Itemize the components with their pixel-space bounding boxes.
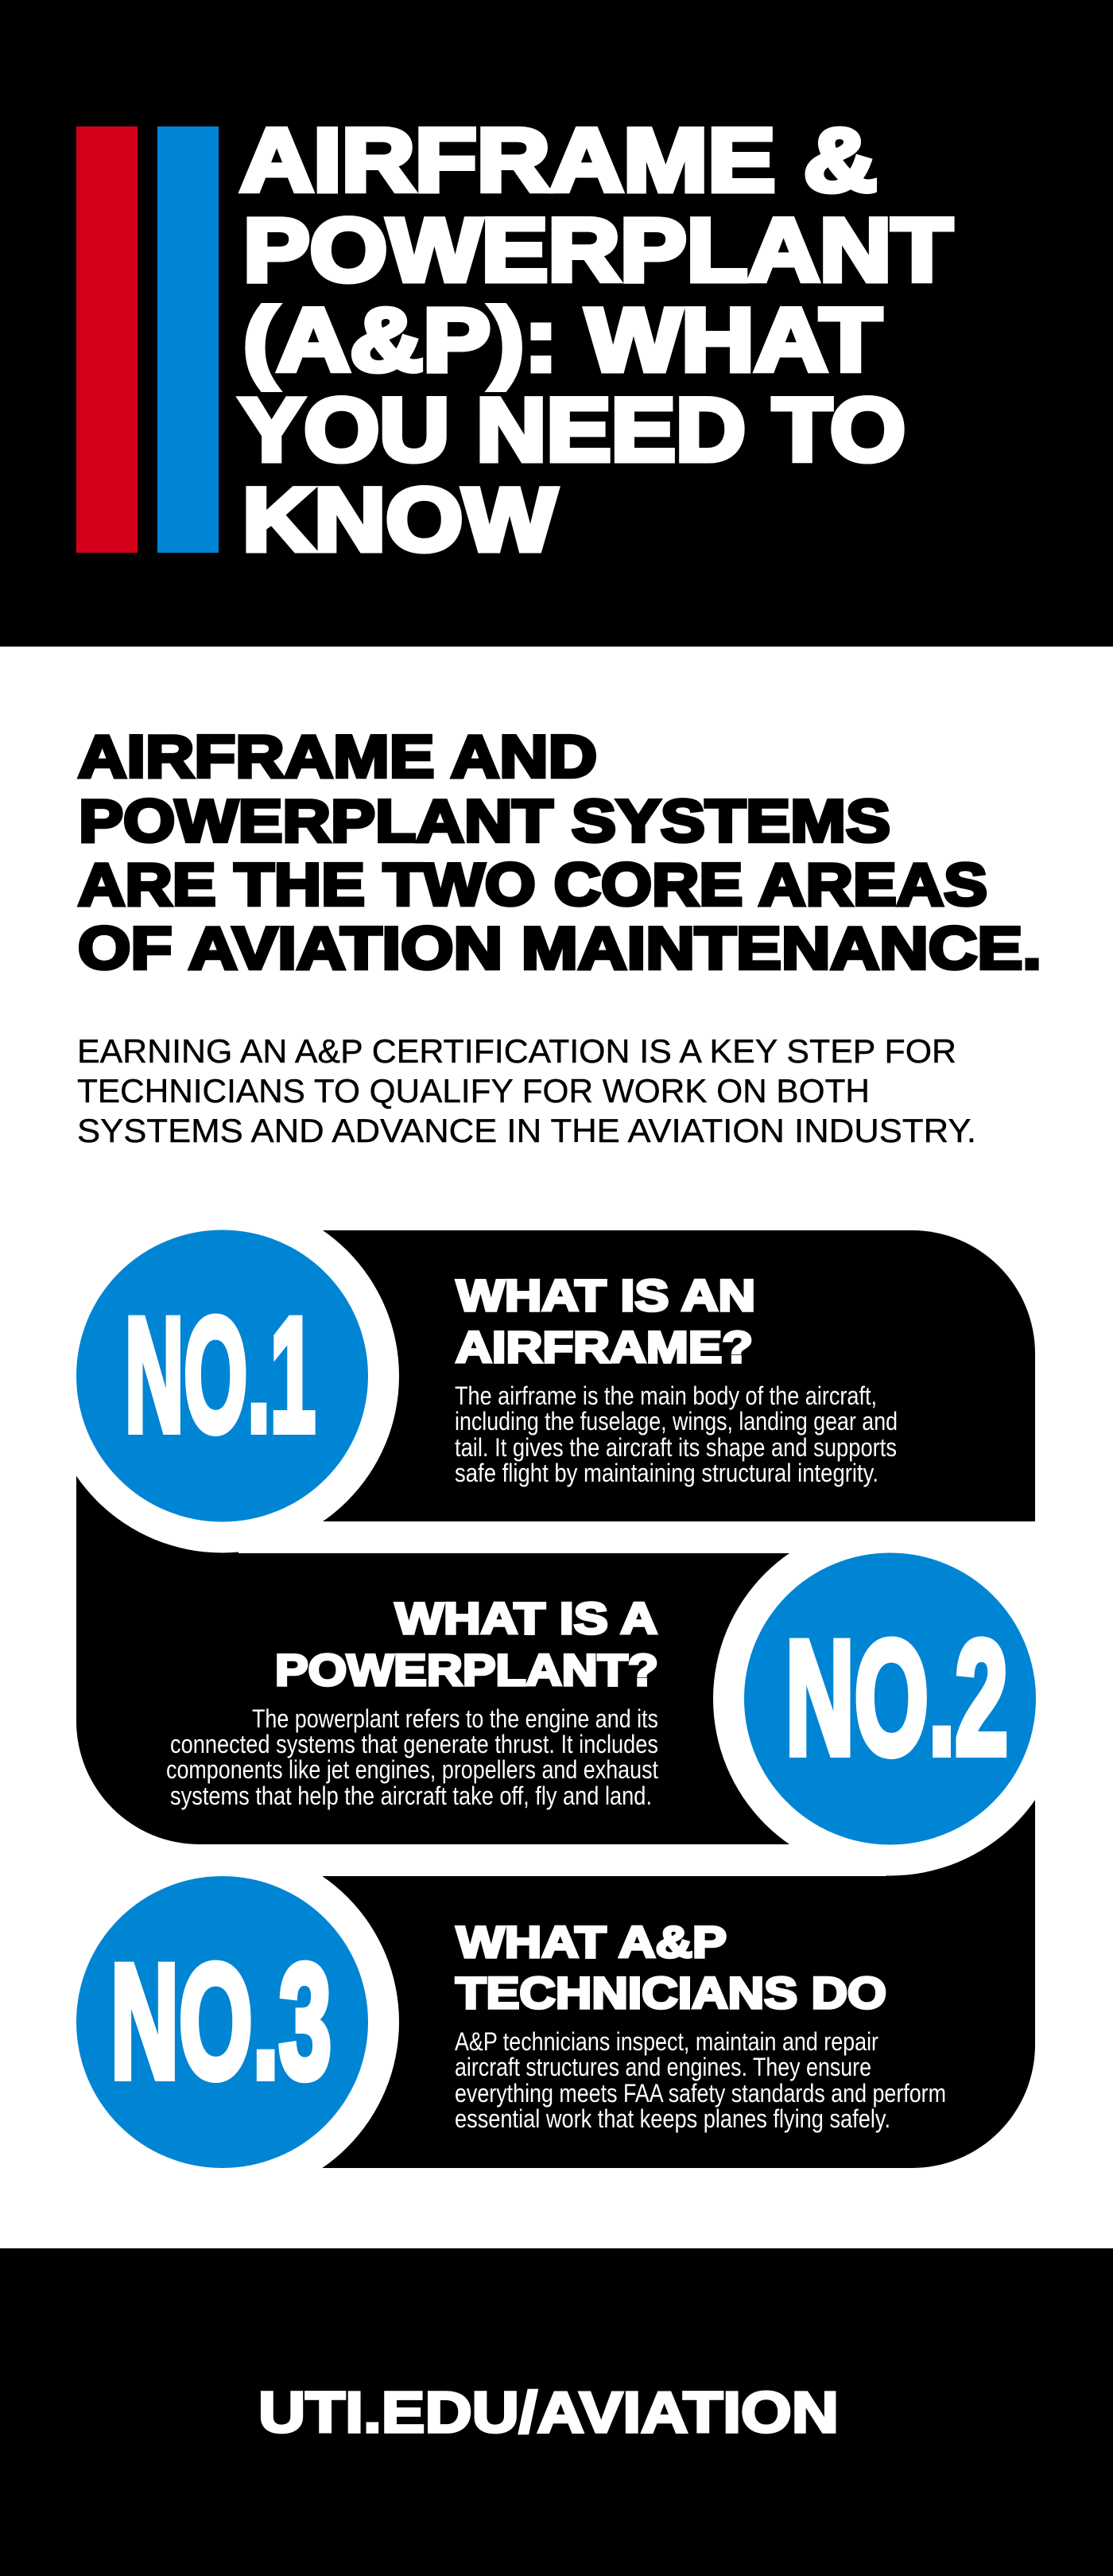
subheading: ARE THE TWO CORE AREAS xyxy=(78,851,987,918)
body text 2 xyxy=(166,1704,658,1810)
heading 2: POWERPLANT? xyxy=(275,1645,658,1695)
heading 3: WHAT A&P xyxy=(456,1917,727,1967)
heading 1 xyxy=(456,1270,755,1372)
intro text: TECHNICIANS TO QUALIFY FOR WORK ON BOTH xyxy=(77,1072,870,1109)
intro text: SYSTEMS AND ADVANCE IN THE AVIATION INDUSTRY. xyxy=(77,1112,976,1149)
intro text xyxy=(77,1032,976,1149)
body text 3: A&P technicians inspect, maintain and repair xyxy=(455,2027,878,2056)
badge 2 xyxy=(744,1552,1036,1845)
badge ring 1 xyxy=(45,1199,399,1552)
badge 3 xyxy=(76,1876,368,2168)
panel 3 shape xyxy=(223,1796,1035,2168)
subheading: POWERPLANT SYSTEMS xyxy=(79,787,890,854)
panel 1 shape xyxy=(223,1230,1035,1521)
badge ring 2 xyxy=(713,1522,1067,1875)
body text 1: including the fuselage, wings, landing gear and xyxy=(455,1407,898,1436)
blue bar xyxy=(157,126,219,553)
body text 2: The powerplant refers to the engine and its xyxy=(252,1704,658,1733)
heading 3 xyxy=(456,1917,886,2018)
title: POWERPLANT xyxy=(243,200,952,300)
panel 2 shape xyxy=(76,1471,890,1844)
subheading: OF AVIATION MAINTENANCE. xyxy=(78,915,1041,981)
title: YOU NEED TO xyxy=(239,380,906,480)
body text 3: aircraft structures and engines. They ensure xyxy=(455,2053,871,2081)
panel: what is an airframe xyxy=(45,1199,1035,1552)
title: KNOW xyxy=(242,470,556,569)
heading 1: AIRFRAME? xyxy=(456,1322,753,1372)
panel: what is a powerplant xyxy=(76,1471,1067,1875)
subheading: AIRFRAME AND xyxy=(78,723,597,790)
body text 1: tail. It gives the aircraft its shape and supports xyxy=(455,1433,897,1462)
intro text: EARNING AN A&P CERTIFICATION IS A KEY STEP FOR xyxy=(77,1032,956,1070)
badge 1: NO.1 xyxy=(125,1284,316,1466)
title: AIRFRAME & xyxy=(240,111,877,210)
header band xyxy=(0,0,1113,647)
body text 1: The airframe is the main body of the aircraft, xyxy=(455,1381,877,1410)
panel: what A&P technicians do xyxy=(45,1796,1035,2199)
badge 1 xyxy=(76,1230,368,1522)
body text 2: components like jet engines, propellers and exhaust xyxy=(166,1755,658,1784)
body text 3: everything meets FAA safety standards and perform xyxy=(455,2079,946,2108)
body text 2: systems that help the aircraft take off, fly and land. xyxy=(170,1781,652,1810)
body text 1: safe flight by maintaining structural integrity. xyxy=(455,1459,878,1487)
title xyxy=(239,111,952,569)
footer band xyxy=(0,2248,1113,2576)
body text 2: connected systems that generate thrust. It includes xyxy=(170,1730,658,1758)
heading 3: TECHNICIANS DO xyxy=(456,1968,886,2018)
subheading xyxy=(78,723,1041,981)
title: (A&P): WHAT xyxy=(243,290,882,390)
badge ring 3 xyxy=(45,1845,399,2199)
body text 1 xyxy=(455,1381,898,1487)
heading 1: WHAT IS AN xyxy=(456,1270,755,1320)
heading 2 xyxy=(275,1593,658,1695)
footer url: UTI.EDU/AVIATION xyxy=(258,2381,839,2445)
badge 3: NO.3 xyxy=(111,1931,332,2112)
body text 3 xyxy=(455,2027,946,2133)
heading 2: WHAT IS A xyxy=(395,1593,657,1643)
red bar xyxy=(76,126,138,553)
body text 3: essential work that keeps planes flying safely. xyxy=(455,2104,890,2133)
